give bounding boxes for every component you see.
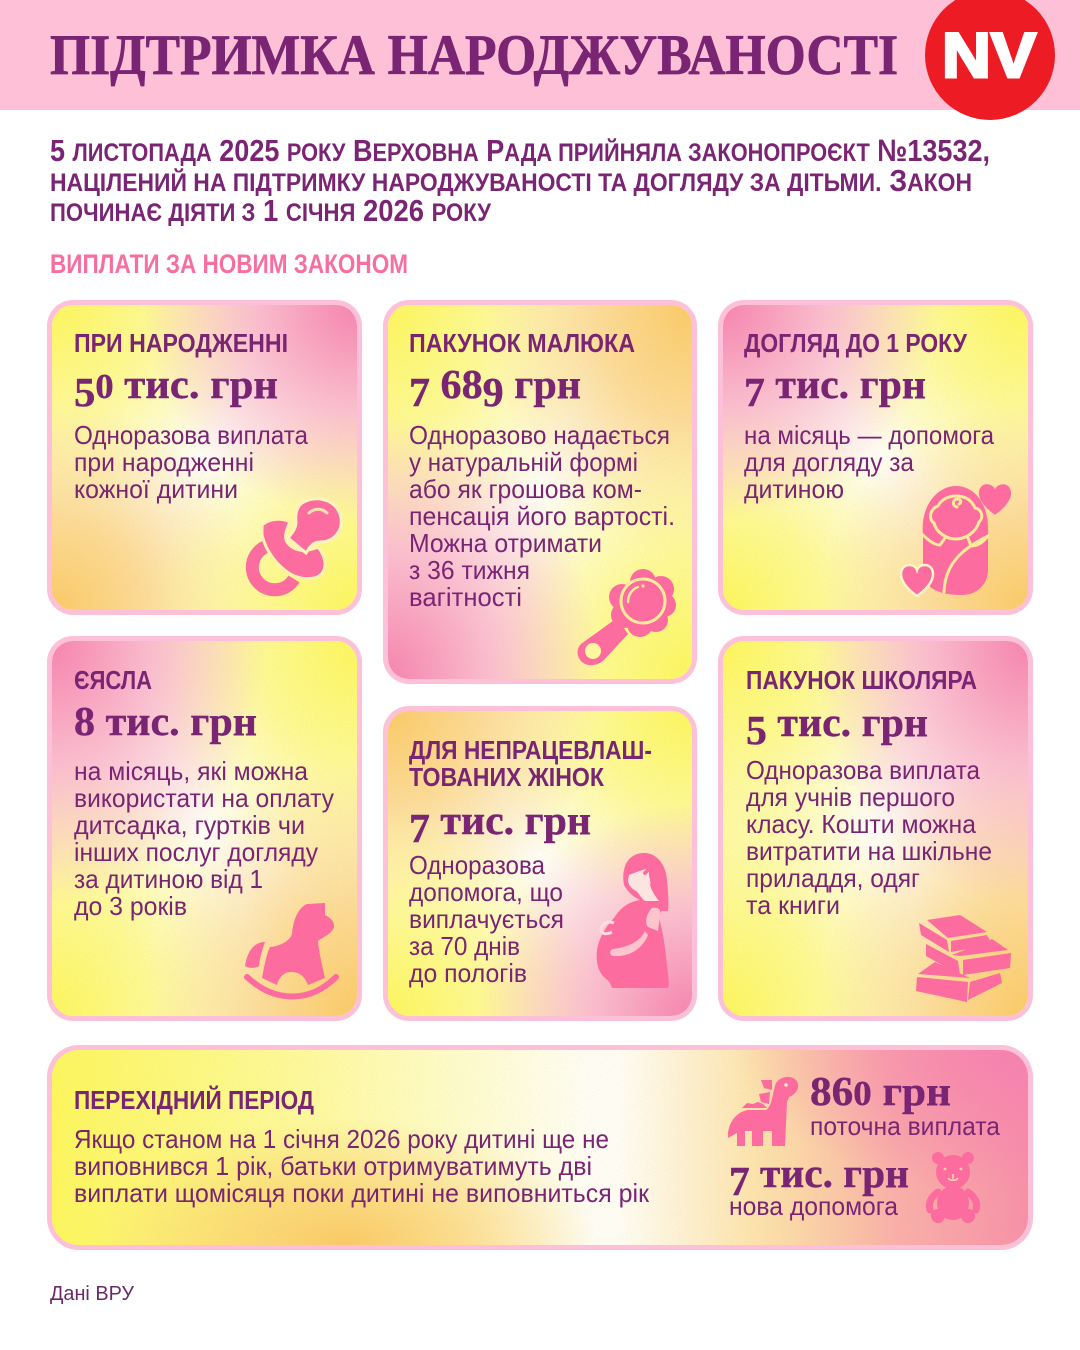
description: та книги — [746, 890, 840, 920]
amount: 5 — [74, 369, 95, 415]
label: ЄЯСЛА — [74, 665, 152, 695]
icon: dinosaur — [728, 1077, 798, 1146]
description — [74, 420, 308, 504]
description: використати на оплату — [74, 783, 334, 813]
icon: pacifier — [252, 499, 341, 590]
description: дитиною — [744, 474, 844, 504]
description: Одноразова виплата — [74, 420, 308, 450]
amount: тис. грн — [430, 797, 591, 843]
panel: догляд до 1 року — [718, 300, 1033, 615]
description: на місяць, які можна — [74, 756, 309, 786]
intro text: 5 ЛИСТОПАДА 2025 РОКУ ВЕРХОВНА РАДА ПРИЙНЯЛА ЗАКОНОПРОЄКТ №13532, — [50, 133, 990, 168]
section heading: ВИПЛАТИ ЗА НОВИМ ЗАКОНОМ — [50, 249, 408, 279]
description: дитсадка, гуртків чи — [74, 810, 305, 840]
panel: перехідний період — [47, 1045, 1033, 1250]
label: ПЕРЕХІДНИЙ ПЕРІОД — [74, 1085, 314, 1115]
icon: rattle — [578, 569, 676, 665]
amount: 9 — [483, 369, 504, 415]
description — [74, 756, 334, 921]
panel: ясла — [47, 636, 362, 1021]
amount: new: тис. грн — [750, 1150, 909, 1196]
amount: 7 — [409, 805, 430, 851]
description: на місяць — допомога — [744, 420, 994, 450]
amount: тис. грн — [765, 361, 926, 407]
description — [409, 850, 564, 988]
panel: при народженні — [47, 300, 362, 615]
label: ПАКУНОК ШКОЛЯРА — [746, 665, 977, 695]
amount: 7 — [409, 369, 430, 415]
amount: 0 — [95, 367, 114, 406]
intro text — [50, 133, 990, 228]
label: ТОВАНИХ ЖІНОК — [409, 762, 604, 792]
description: або як грошова ком- — [409, 474, 642, 504]
source: Дані ВРУ — [50, 1283, 134, 1305]
amount: 5 — [746, 707, 767, 753]
description: допомога, що — [409, 877, 563, 907]
description: витратити на шкільне — [746, 836, 992, 866]
header band — [0, 0, 1080, 110]
amount: 68 — [430, 361, 483, 407]
description: за дитиною від 1 — [74, 864, 263, 894]
description: Можна отримати — [409, 528, 602, 558]
amount: грн — [504, 361, 581, 407]
icon: swaddled baby with hearts — [901, 484, 1011, 596]
amount: тис. грн — [124, 361, 271, 407]
label: ПРИ НАРОДЖЕННІ — [74, 328, 288, 358]
icon: teddy bear — [929, 1152, 977, 1223]
description — [744, 420, 994, 504]
caption: new: нова допомога — [729, 1191, 899, 1221]
panel: пакунок школяра — [718, 636, 1033, 1021]
caption: current: поточна виплата — [810, 1111, 1000, 1141]
description: кожної дитини — [74, 474, 238, 504]
description: за 70 днів — [409, 931, 520, 961]
amount: 7 — [744, 369, 765, 415]
description: виповнився 1 рік, батьки отримуватимуть дві — [74, 1151, 592, 1181]
amount: 8 тис. грн — [74, 698, 257, 744]
title: ПІДТРИМКА НАРОДЖУВАНОСТІ — [50, 24, 898, 87]
icon: rocking horse — [245, 903, 336, 996]
description: виплати щомісяця поки дитині не виповниться рік — [74, 1178, 650, 1208]
description — [746, 755, 992, 920]
NV logo: NV — [942, 21, 1036, 91]
description: у натуральній формі — [409, 447, 638, 477]
label — [409, 735, 652, 792]
description: Одноразово надається — [409, 420, 670, 450]
label: ПАКУНОК МАЛЮКА — [409, 328, 635, 358]
amount: current: 860 грн — [810, 1068, 951, 1114]
icon: books — [916, 915, 1011, 1002]
description: пенсація його вартості. — [409, 501, 675, 531]
description: Якщо станом на 1 січня 2026 року дитині ще не — [74, 1124, 609, 1154]
description: для догляду за — [744, 447, 915, 477]
amount: new: 7 — [729, 1158, 750, 1204]
description: до пологів — [409, 958, 527, 988]
amount: тис. грн — [767, 699, 928, 745]
NV logo — [925, 0, 1055, 120]
description: Одноразова виплата — [746, 755, 980, 785]
description: класу. Кошти можна — [746, 809, 977, 839]
description: при народженні — [74, 447, 254, 477]
description: Одноразова — [409, 850, 545, 880]
label: ДОГЛЯД ДО 1 РОКУ — [744, 328, 968, 358]
description: виплачується — [409, 904, 564, 934]
intro text: ПОЧИНАЄ ДІЯТИ З 1 СІЧНЯ 2026 РОКУ — [50, 193, 491, 228]
description: інших послуг догляду — [74, 837, 318, 867]
label: ДЛЯ НЕПРАЦЕВЛАШ- — [409, 735, 652, 765]
description: з 36 тижня — [409, 555, 530, 585]
intro text: НАЦІЛЕНИЙ НА ПІДТРИМКУ НАРОДЖУВАНОСТІ ТА ДОГЛЯДУ ЗА ДІТЬМИ. ЗАКОН — [50, 163, 972, 198]
icon: pregnant woman — [597, 853, 669, 988]
description: до 3 років — [74, 891, 187, 921]
description — [74, 1124, 650, 1208]
description: приладдя, одяг — [746, 863, 920, 893]
description — [409, 420, 675, 612]
description: вагітності — [409, 582, 522, 612]
description: для учнів першого — [746, 782, 955, 812]
panel: для непрацевлаштованих жінок — [383, 706, 697, 1021]
panel: пакунок малюка — [383, 300, 697, 684]
